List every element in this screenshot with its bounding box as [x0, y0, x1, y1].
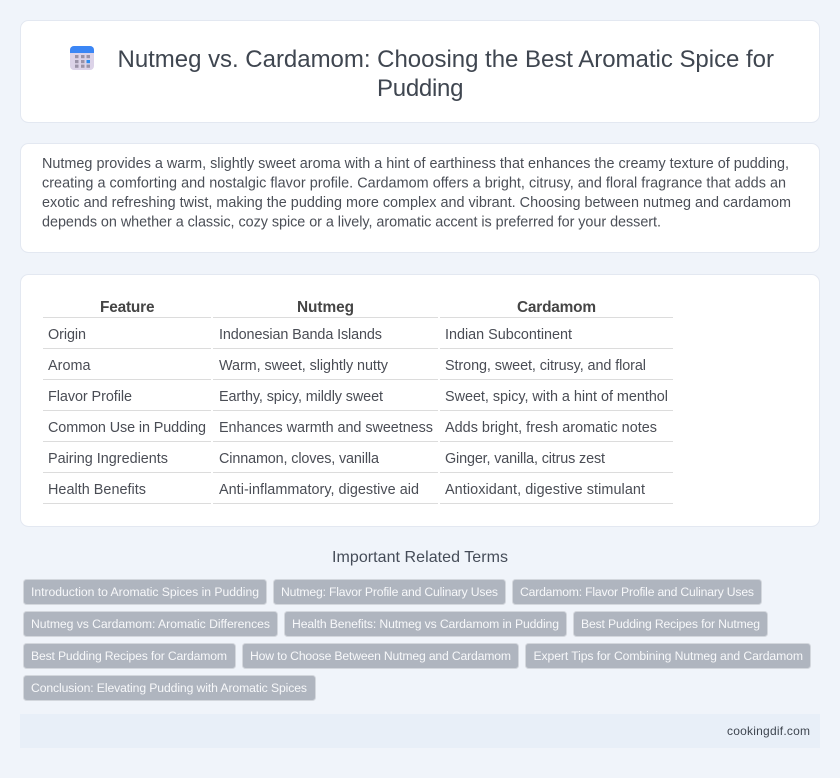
- tag: cardamom flavor profile: [512, 580, 762, 604]
- table row: pairing ingredients: Pairing Ingredients: [48, 451, 168, 467]
- tag: nutmeg flavor profile: Nutmeg: Flavor Profile and Culinary Uses: [281, 585, 498, 599]
- table row: common use in pudding: Enhances warmth and sweetness: [219, 420, 433, 436]
- tag: nutmeg flavor profile: [274, 580, 506, 604]
- table row: origin: Indonesian Banda Islands: [219, 327, 382, 343]
- tag: introduction: [24, 580, 266, 604]
- tag: recipes for nutmeg: [574, 612, 768, 636]
- table row: health benefits: Anti-inflammatory, digestive aid: [219, 482, 419, 498]
- table header: Nutmeg: [297, 299, 354, 316]
- table row: flavor profile: [43, 389, 673, 410]
- tag: how to choose: [242, 644, 518, 668]
- table row: aroma: [43, 358, 673, 380]
- tag: aromatic differences: [24, 612, 278, 636]
- tag: recipes for cardamom: [24, 644, 236, 668]
- text block: introduction: [42, 156, 791, 230]
- text block: introduction: depends on whether a classic, cozy spice or a lively, aromatic accent is preferred for your dessert.: [42, 214, 661, 230]
- tag: recipes for cardamom: Best Pudding Recipes for Cardamom: [31, 649, 227, 663]
- text block: introduction: exotic and refreshing twist, making the pudding more complex and vibrant. Choosing between nutmeg and cardamom: [42, 195, 791, 211]
- tag: conclusion: Conclusion: Elevating Pudding with Aromatic Spices: [31, 681, 307, 695]
- tag: aromatic differences: Nutmeg vs Cardamom: Aromatic Differences: [31, 617, 270, 631]
- tag: recipes for nutmeg: Best Pudding Recipes for Nutmeg: [581, 617, 760, 631]
- tag: conclusion: [24, 676, 316, 700]
- panel: comparison table: [20, 274, 820, 526]
- table row: aroma: Strong, sweet, citrusy, and floral: [445, 358, 646, 374]
- table header: [43, 299, 673, 318]
- title: [118, 46, 774, 102]
- related terms tags: [24, 580, 810, 700]
- panel: title card: [20, 20, 820, 122]
- footer: cookingdif.com: [727, 724, 810, 738]
- tag: health benefits: [284, 612, 566, 636]
- table row: pairing ingredients: Ginger, vanilla, citrus zest: [445, 451, 605, 467]
- table row: aroma: Aroma: [48, 358, 90, 374]
- table row: origin: Origin: [48, 327, 86, 343]
- table header: Cardamom: [517, 299, 596, 316]
- table header: Feature: [100, 299, 155, 316]
- table row: pairing ingredients: [43, 451, 673, 472]
- table row: flavor profile: Earthy, spicy, mildly sweet: [219, 389, 383, 405]
- title: Nutmeg vs. Cardamom: Choosing the Best Aromatic Spice for: [118, 46, 774, 73]
- tag: health benefits: Health Benefits: Nutmeg vs Cardamom in Pudding: [292, 617, 559, 631]
- tag: cardamom flavor profile: Cardamom: Flavor Profile and Culinary Uses: [520, 585, 754, 599]
- icon: calendar: [70, 46, 94, 70]
- table row: flavor profile: Flavor Profile: [48, 389, 132, 405]
- text block: introduction: Nutmeg provides a warm, slightly sweet aroma with a hint of earthiness that enhances the creamy texture of pudding,: [42, 156, 789, 172]
- table row: pairing ingredients: Cinnamon, cloves, vanilla: [219, 451, 379, 467]
- footer: [20, 714, 820, 748]
- table row: common use in pudding: [43, 420, 673, 442]
- table row: health benefits: Antioxidant, digestive stimulant: [445, 482, 645, 498]
- tag: expert tips: Expert Tips for Combining Nutmeg and Cardamom: [534, 649, 803, 663]
- text block: introduction: creating a comforting and nostalgic flavor profile. Cardamom offers a bright, citrusy, and floral fragrance that adds an: [42, 176, 786, 192]
- table row: aroma: Warm, sweet, slightly nutty: [219, 358, 389, 374]
- table row: common use in pudding: Adds bright, fresh aromatic notes: [445, 420, 657, 436]
- title: Pudding: [377, 75, 464, 102]
- table row: origin: Indian Subcontinent: [445, 327, 572, 343]
- table row: health benefits: [43, 482, 673, 504]
- tag: how to choose: How to Choose Between Nutmeg and Cardamom: [250, 649, 511, 663]
- table row: flavor profile: Sweet, spicy, with a hint of menthol: [445, 389, 668, 405]
- table row: common use in pudding: Common Use in Pudding: [48, 420, 206, 436]
- panel: introduction text: [20, 144, 820, 252]
- tag: expert tips: [526, 644, 810, 668]
- heading: important related terms: Important Related Terms: [332, 549, 508, 566]
- table row: origin: [43, 327, 673, 348]
- table row: health benefits: Health Benefits: [48, 482, 146, 498]
- tag: introduction: Introduction to Aromatic Spices in Pudding: [31, 585, 259, 599]
